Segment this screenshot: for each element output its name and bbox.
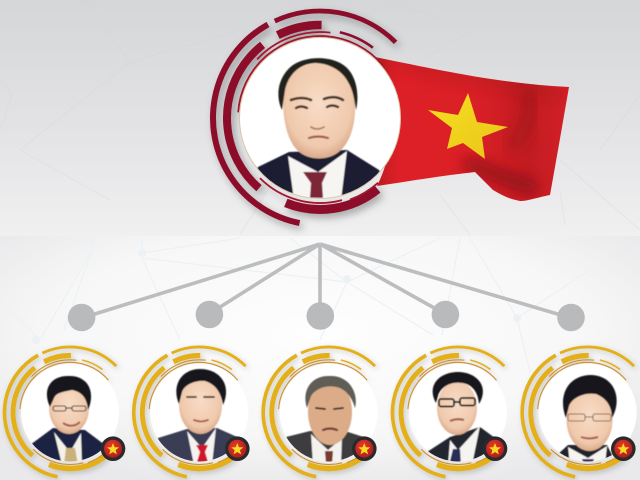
Vietnamese flag (375, 57, 569, 201)
face (283, 63, 355, 158)
hair (278, 58, 357, 110)
background: lower section (0, 236, 640, 480)
portrait card 4 (390, 345, 508, 480)
tie (303, 172, 327, 198)
connector tree (68, 244, 585, 331)
portrait card 1 (2, 345, 126, 480)
connector nodes (68, 301, 585, 331)
flag badge (611, 436, 636, 461)
flag badge (101, 436, 125, 461)
suit (257, 149, 380, 195)
flag badge (483, 436, 507, 461)
flag badge (352, 436, 377, 461)
background: upper section (0, 0, 640, 236)
portrait card 3 (260, 345, 378, 480)
main portrait ring (178, 0, 462, 260)
shirt (288, 151, 347, 200)
main portrait (240, 38, 400, 210)
flag star (428, 93, 508, 159)
portrait card 2 (132, 345, 250, 480)
flag badge (225, 436, 250, 461)
portrait card 5 (520, 345, 637, 480)
